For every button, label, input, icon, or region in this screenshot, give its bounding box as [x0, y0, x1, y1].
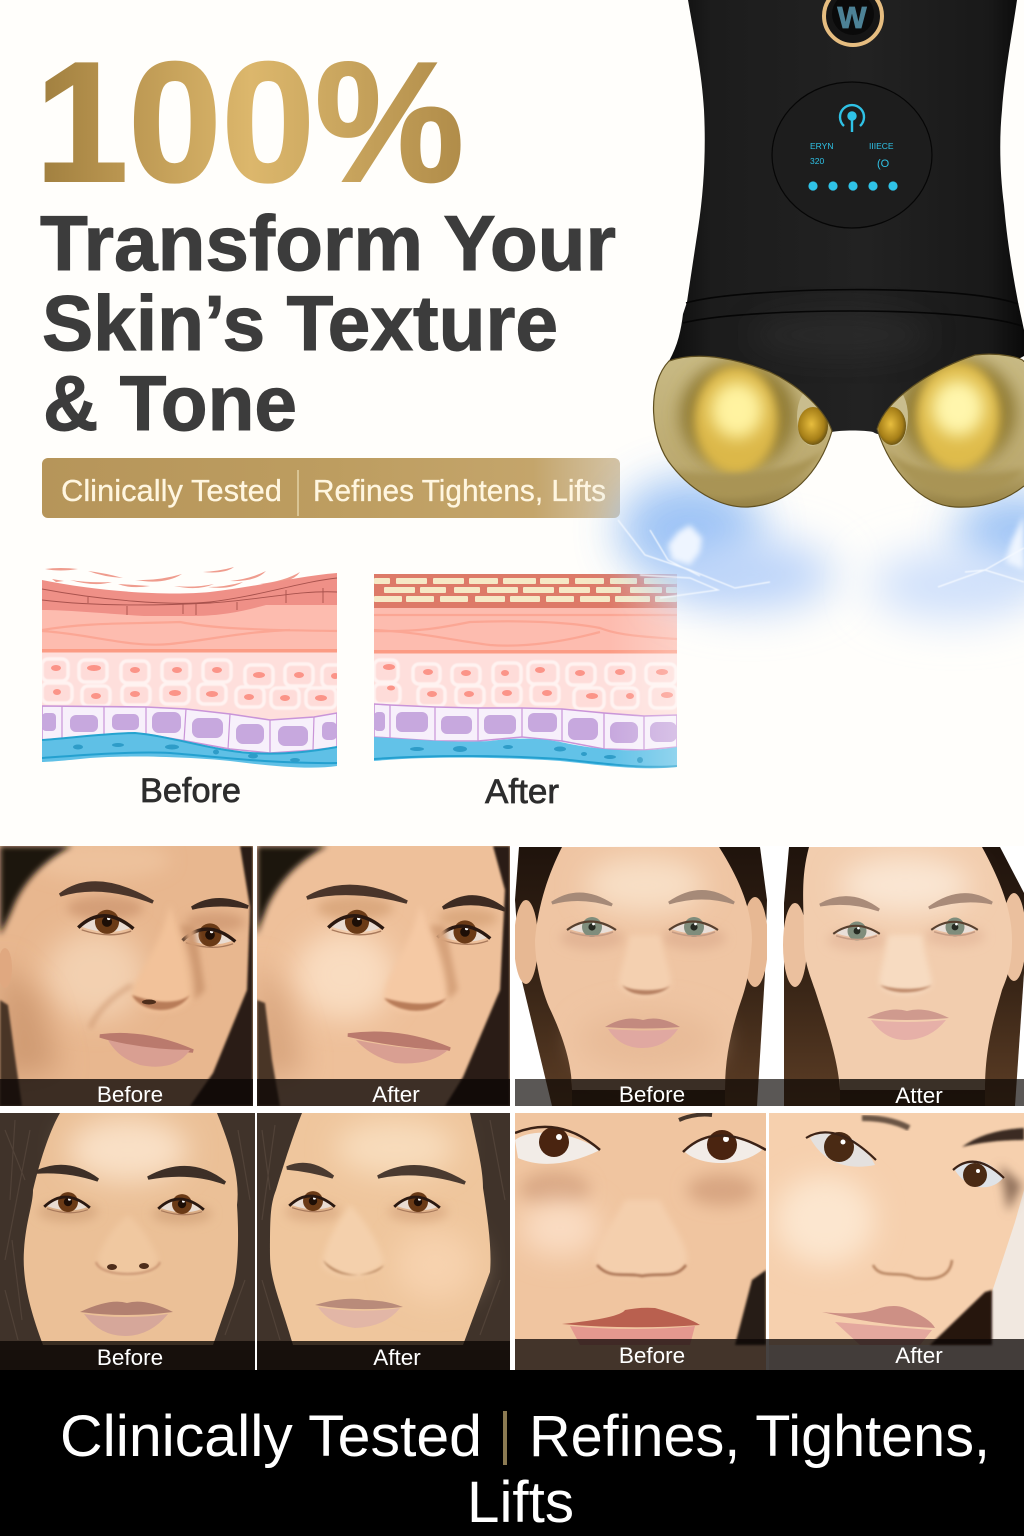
blue base layer: [42, 733, 337, 768]
caption: after: After: [895, 1343, 943, 1368]
device: microcurrent facial roller: [640, 0, 1024, 515]
footer text: [60, 1404, 990, 1535]
flaky surface scales: [45, 567, 300, 588]
heading: Transform Your Skin's Texture & Tone: Transform Your: [40, 199, 616, 287]
display readouts: [810, 141, 894, 170]
logo badge: [824, 0, 882, 45]
skin diagram: before: [42, 567, 348, 768]
heading: Transform Your Skin's Texture & Tone: & Tone: [43, 359, 297, 447]
stratum corneum band: [42, 573, 337, 616]
label: diagram before: Before: [140, 772, 241, 810]
photo: woman 1 after: [257, 846, 510, 1106]
caption: before: Before: [97, 1082, 163, 1107]
caption: before: Before: [97, 1345, 163, 1370]
display readouts: (O: [877, 158, 890, 170]
electric blue glow with lightning: [618, 478, 1024, 619]
caption: after: Atter: [895, 1083, 943, 1108]
headline: 100%: 100%: [35, 27, 464, 218]
blue base layer: [374, 737, 677, 768]
footer text: Clinically Tested: [60, 1404, 482, 1469]
compact brick layer: [374, 574, 677, 608]
display readouts: IIIECE: [869, 141, 894, 151]
footer band: [0, 1370, 1024, 1536]
control panel: [772, 82, 932, 228]
level dots: [808, 181, 898, 191]
photo: woman 2 before: [514, 847, 768, 1106]
caption bars: row 1: [0, 1079, 1024, 1108]
display readouts: 320: [810, 156, 824, 166]
footer text: Refines, Tightens,: [529, 1404, 990, 1469]
dermis layer: [42, 605, 337, 649]
basal cell layer: [374, 704, 677, 750]
heading: Transform Your Skin's Texture & Tone: Skin’s Texture: [42, 279, 558, 367]
photo: woman 2 after: [783, 847, 1024, 1106]
caption: after: After: [373, 1345, 421, 1370]
badge: clinically tested, refines tightens lifts: [42, 458, 620, 518]
gold roller ball left: [652, 356, 832, 508]
caption bars: row 2: [0, 1339, 1024, 1370]
badge: clinically tested, refines tightens lifts: Clinically Tested: [61, 473, 282, 508]
caption: before: Before: [619, 1343, 685, 1368]
photo: woman 3 after: [257, 1113, 510, 1370]
skin diagram: after: [374, 574, 677, 770]
caption: before: Before: [619, 1082, 685, 1107]
face and neck: [535, 847, 752, 1090]
heading: Transform Your Skin's Texture & Tone: [40, 199, 616, 447]
photo grid background: [0, 846, 1024, 1370]
epidermis cells: [42, 652, 337, 720]
display readouts: ERYN: [810, 141, 833, 151]
dermis layer: [374, 608, 677, 650]
lower skirt sheen: [750, 313, 930, 357]
hair: [515, 847, 767, 1106]
photo: woman 1 before: [0, 840, 253, 1106]
label: diagram after: After: [485, 773, 559, 811]
gold roller ball right: [876, 354, 1024, 508]
photo: woman 4 after close-up: [769, 1113, 1024, 1370]
power icon: [840, 105, 864, 132]
basal cell layer: [42, 706, 337, 753]
photo: woman 3 before: [0, 1113, 255, 1370]
caption: after: After: [372, 1082, 420, 1107]
badge: clinically tested, refines tightens lifts: Refines Tightens, Lifts: [313, 473, 606, 508]
device body: [669, 0, 1024, 435]
epidermis cells: [374, 654, 677, 716]
footer text: Lifts: [467, 1470, 574, 1535]
logo badge: W: [837, 0, 867, 35]
collar seam lines: [683, 290, 1022, 326]
photo: woman 4 before close-up: [515, 1113, 766, 1370]
ears: [514, 900, 538, 984]
